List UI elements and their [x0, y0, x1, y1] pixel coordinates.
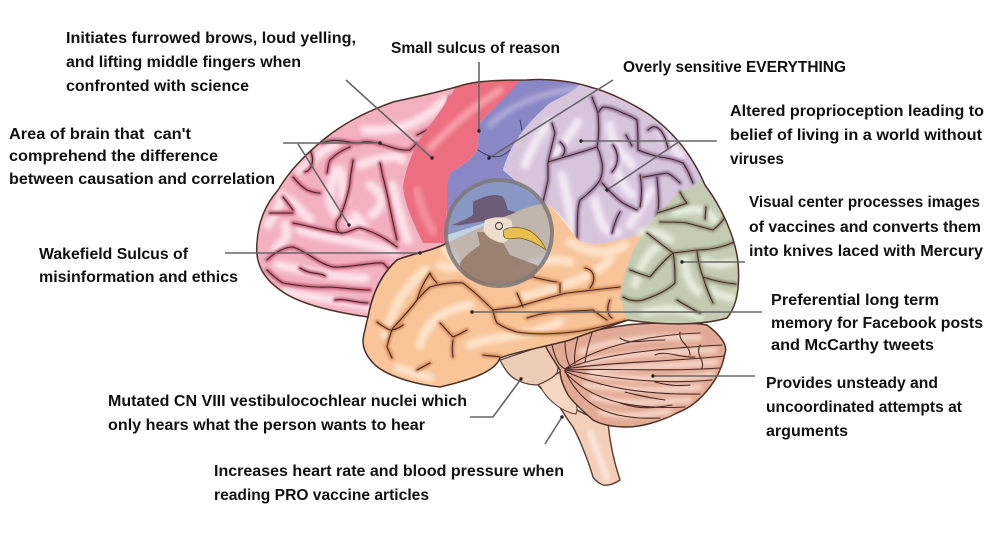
label: CN VIII	[108, 393, 467, 434]
occipital lobe (green)	[620, 178, 738, 324]
hat	[452, 195, 516, 225]
frontal lobe (pink)	[257, 88, 455, 316]
label: causation: Area of brain that can't	[9, 126, 192, 143]
label: cerebellum	[766, 375, 963, 440]
pons	[500, 345, 558, 385]
label: causation	[9, 126, 275, 188]
medallion ring	[446, 180, 552, 286]
label: visual center: Visual center processes images	[749, 194, 980, 211]
label: amygdala yelling: confronted with science	[66, 78, 249, 95]
label: wakefield sulcus: misinformation and ethics	[39, 269, 238, 286]
label: proprioception: belief of living in a world without	[730, 127, 983, 144]
label: overly sensitive: Overly sensitive EVERYTHING	[623, 59, 846, 76]
postcentral gyrus (purple)	[447, 80, 580, 235]
label: long term memory: memory for Facebook posts	[771, 315, 983, 332]
cerebrum fills	[257, 80, 738, 386]
parietal lobe (lilac)	[503, 85, 701, 244]
label: proprioception: Altered proprioception leading to	[730, 103, 984, 120]
label: visual center: into knives laced with Mercury	[749, 243, 983, 260]
label: visual center: of vaccines and converts them	[749, 219, 981, 236]
temporal lobe (orange)	[364, 204, 642, 386]
label: causation: comprehend the difference	[9, 148, 218, 165]
label: heart rate	[214, 463, 564, 504]
brain illustration	[256, 78, 740, 486]
label: proprioception	[730, 103, 984, 168]
logo medallion	[446, 180, 552, 286]
label: long term memory: and McCarthy tweets	[771, 337, 934, 354]
brainstem	[538, 372, 620, 485]
label: heart rate: reading PRO vaccine articles	[214, 487, 429, 504]
label: cerebellum: arguments	[766, 423, 848, 440]
label: wakefield sulcus: Wakefield Sulcus of	[39, 246, 189, 263]
label: amygdala yelling: and lifting middle fingers when	[66, 54, 301, 71]
label: heart rate: Increases heart rate and blood pressure when	[214, 463, 564, 480]
face	[484, 217, 512, 243]
label: causation: between causation and correlation	[9, 171, 275, 188]
leader lines	[225, 62, 762, 444]
label: amygdala yelling: Initiates furrowed brows, loud yelling,	[66, 30, 356, 47]
label: cerebellum: Provides unsteady and	[766, 375, 938, 392]
figure body	[460, 232, 537, 284]
beak	[503, 227, 546, 250]
label: CN VIII: Mutated CN VIII vestibulocochlear nuclei which	[108, 393, 467, 410]
label: long term memory: Preferential long term	[771, 292, 939, 309]
precentral gyrus (red)	[403, 80, 520, 243]
label: small sulcus: Small sulcus of reason	[391, 40, 560, 57]
label: visual center	[749, 194, 983, 260]
label: wakefield sulcus	[39, 246, 238, 286]
label: amygdala yelling	[66, 30, 356, 95]
label: CN VIII: only hears what the person wants to hear	[108, 417, 425, 434]
cerebrum outline	[257, 79, 739, 387]
label: long term memory	[771, 292, 983, 354]
label: proprioception: viruses	[730, 151, 784, 168]
cerebellum	[545, 323, 726, 427]
label: cerebellum: uncoordinated attempts at	[766, 399, 963, 416]
